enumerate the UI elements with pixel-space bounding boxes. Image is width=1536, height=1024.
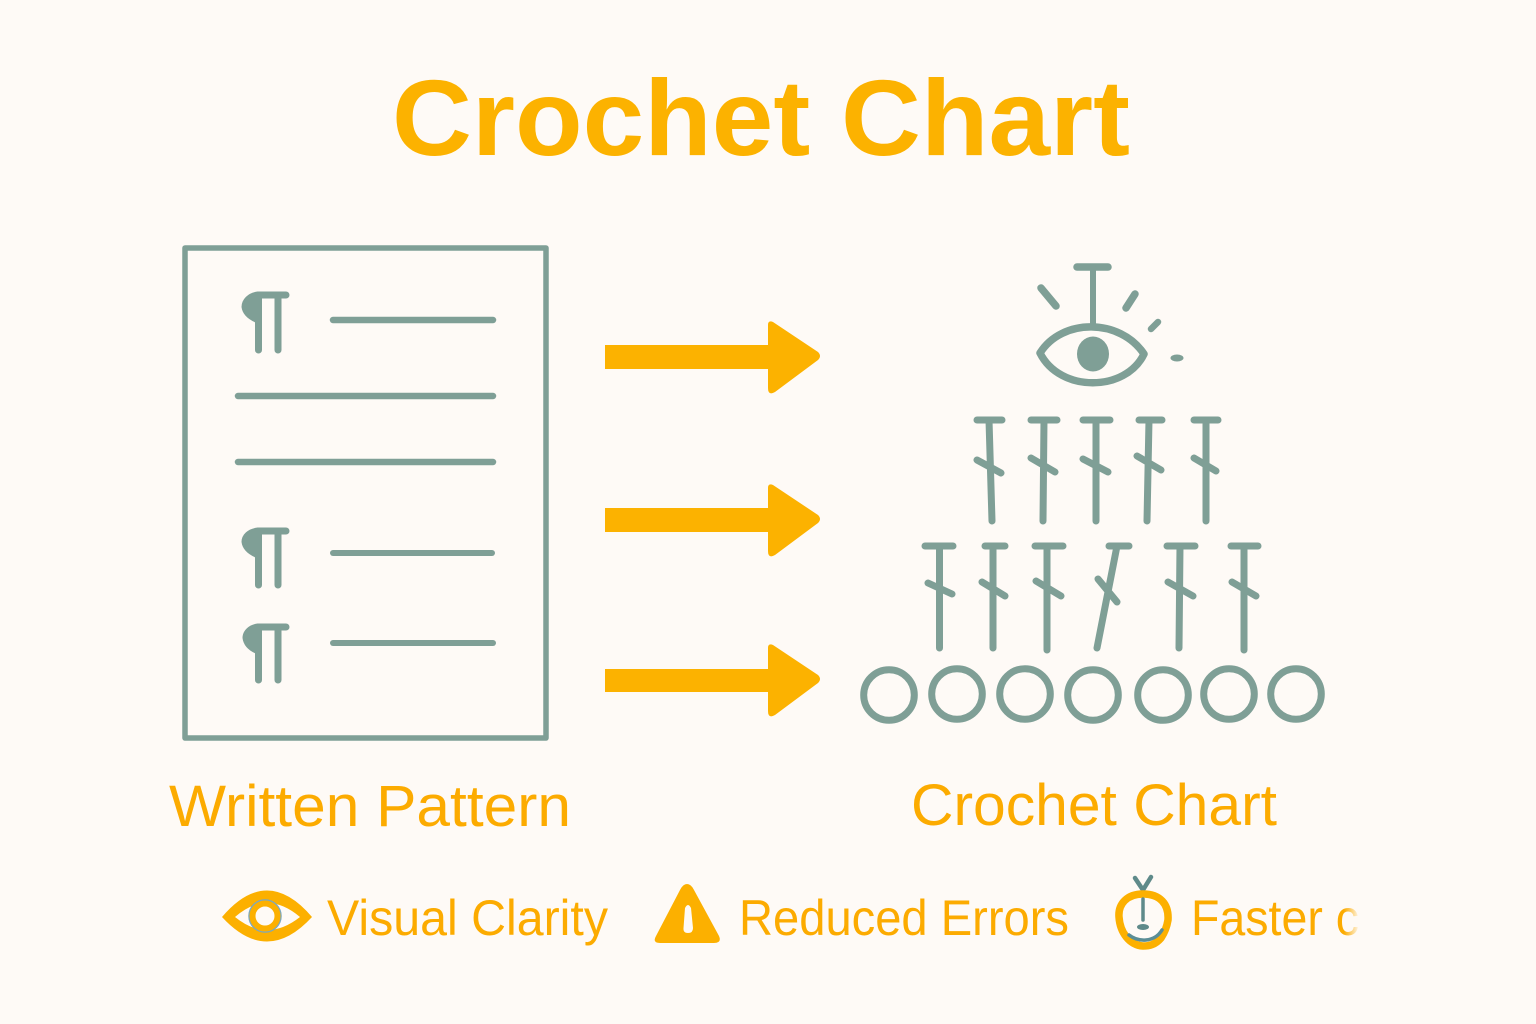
arrow 2 — [605, 484, 820, 556]
legend: reduced errors: Reduced Errors — [739, 890, 1069, 946]
arrow 1 — [605, 321, 820, 393]
icon: warning triangle — [655, 884, 720, 943]
icon: clock fruit — [1119, 877, 1168, 946]
title: Crochet Chart — [392, 57, 1130, 178]
legend: faster (clipped): Faster c — [1191, 890, 1359, 946]
chart: chain circles — [864, 669, 1321, 720]
pilcrow and line 2 — [242, 528, 492, 585]
chart: upper stitch row — [977, 420, 1218, 521]
label: written pattern: Written Pattern — [169, 774, 571, 839]
panel: written pattern document — [185, 248, 546, 738]
full line 1 — [238, 393, 493, 399]
pilcrow and line 1 — [242, 292, 493, 350]
chart: lower stitch row — [925, 546, 1258, 650]
label: crochet chart: Crochet Chart — [911, 773, 1277, 838]
full line 2 — [238, 459, 493, 465]
pilcrow and line 3 — [243, 624, 493, 680]
icon: visual clarity eye — [222, 890, 312, 942]
legend: visual clarity: Visual Clarity — [327, 890, 608, 946]
icon: eye with stitch — [1040, 267, 1184, 383]
arrow 3 — [605, 644, 820, 716]
